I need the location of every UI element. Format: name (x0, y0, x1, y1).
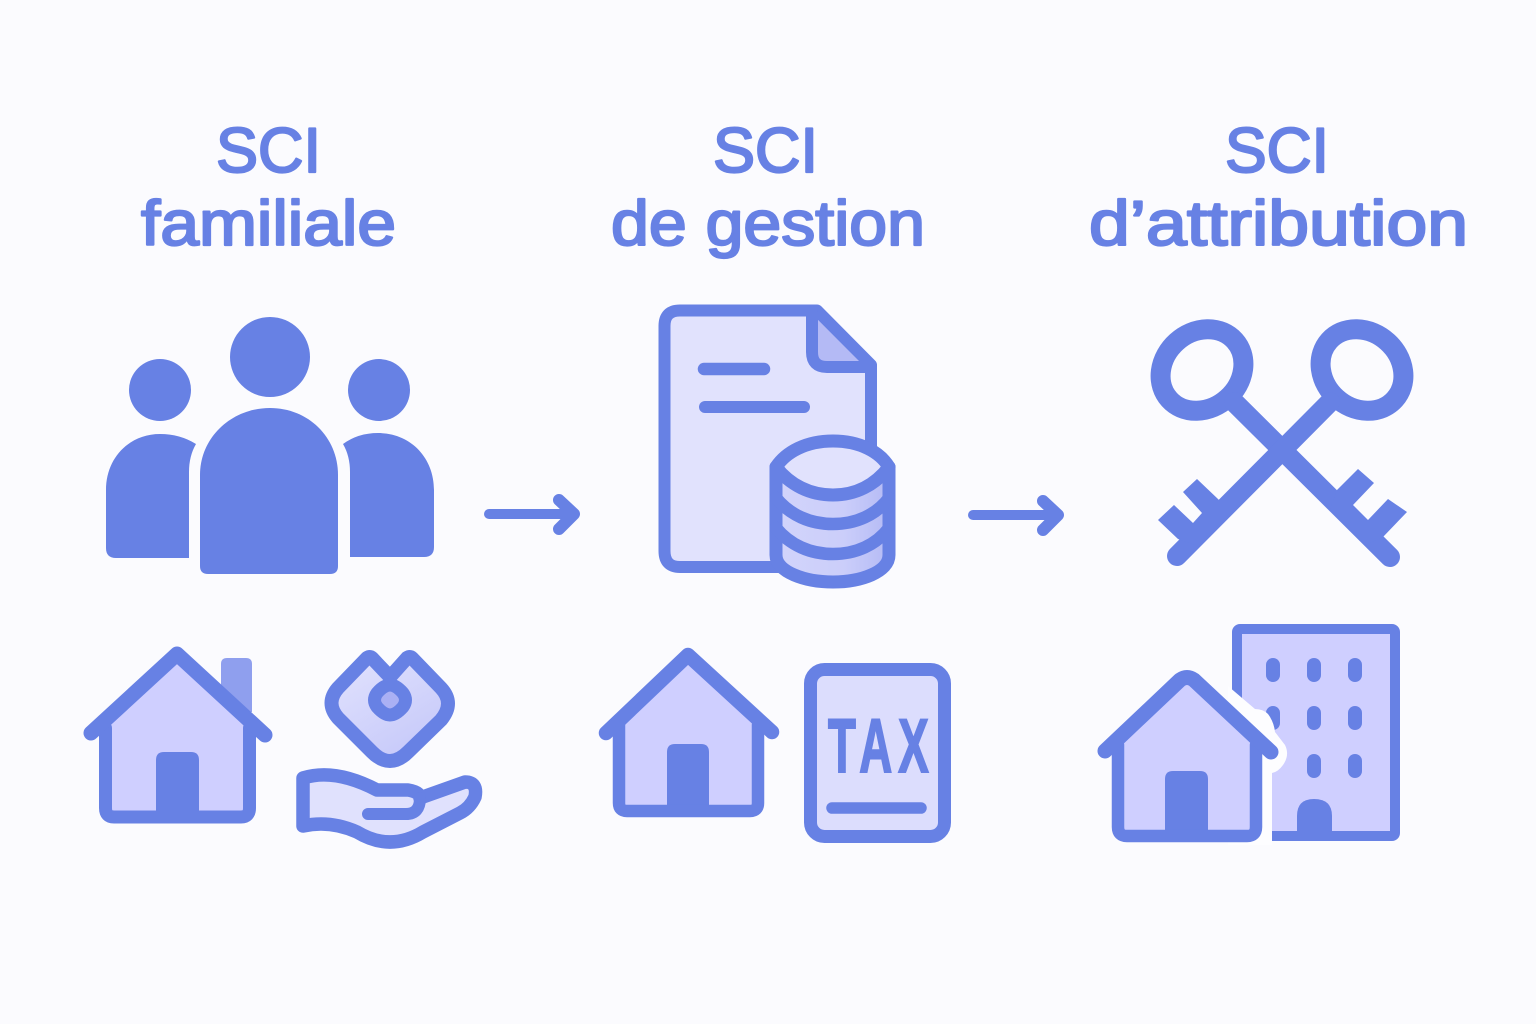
heading: SCI d'attribution: d’attribution (1089, 189, 1468, 259)
icon: tax document: TAX (828, 704, 929, 789)
heading: SCI familiale: SCI (216, 116, 321, 186)
heading: SCI familiale: familiale (141, 189, 396, 259)
heading: SCI de gestion: de gestion (611, 189, 925, 259)
column: SCI familiale (91, 116, 476, 842)
icon: house with chimney (91, 654, 265, 817)
heading: SCI familiale (141, 116, 396, 259)
icon: crossed keys (1144, 312, 1420, 557)
arrow: gestion to attribution (973, 501, 1058, 530)
key: left ring, teeth lower right (1144, 312, 1407, 557)
heading: SCI d'attribution (1089, 116, 1468, 259)
heading: SCI d'attribution: SCI (1225, 116, 1329, 186)
column: SCI d'attribution (1089, 116, 1468, 845)
document (664, 310, 871, 567)
icon: house (606, 655, 772, 811)
icon: document with database (664, 310, 889, 582)
column: SCI de gestion (606, 116, 944, 836)
database (776, 441, 889, 582)
heading: SCI de gestion (611, 116, 925, 259)
arrow: familiale to gestion (489, 500, 574, 529)
key: right ring, teeth lower left (1158, 312, 1420, 556)
icon: heart held above open hand (303, 657, 476, 842)
icon: apartment building (1228, 629, 1395, 845)
heading: SCI de gestion: SCI (713, 116, 818, 186)
icon: family of three people (106, 317, 434, 574)
icon: house in front of building (1105, 676, 1271, 836)
icon: tax document (810, 670, 944, 836)
